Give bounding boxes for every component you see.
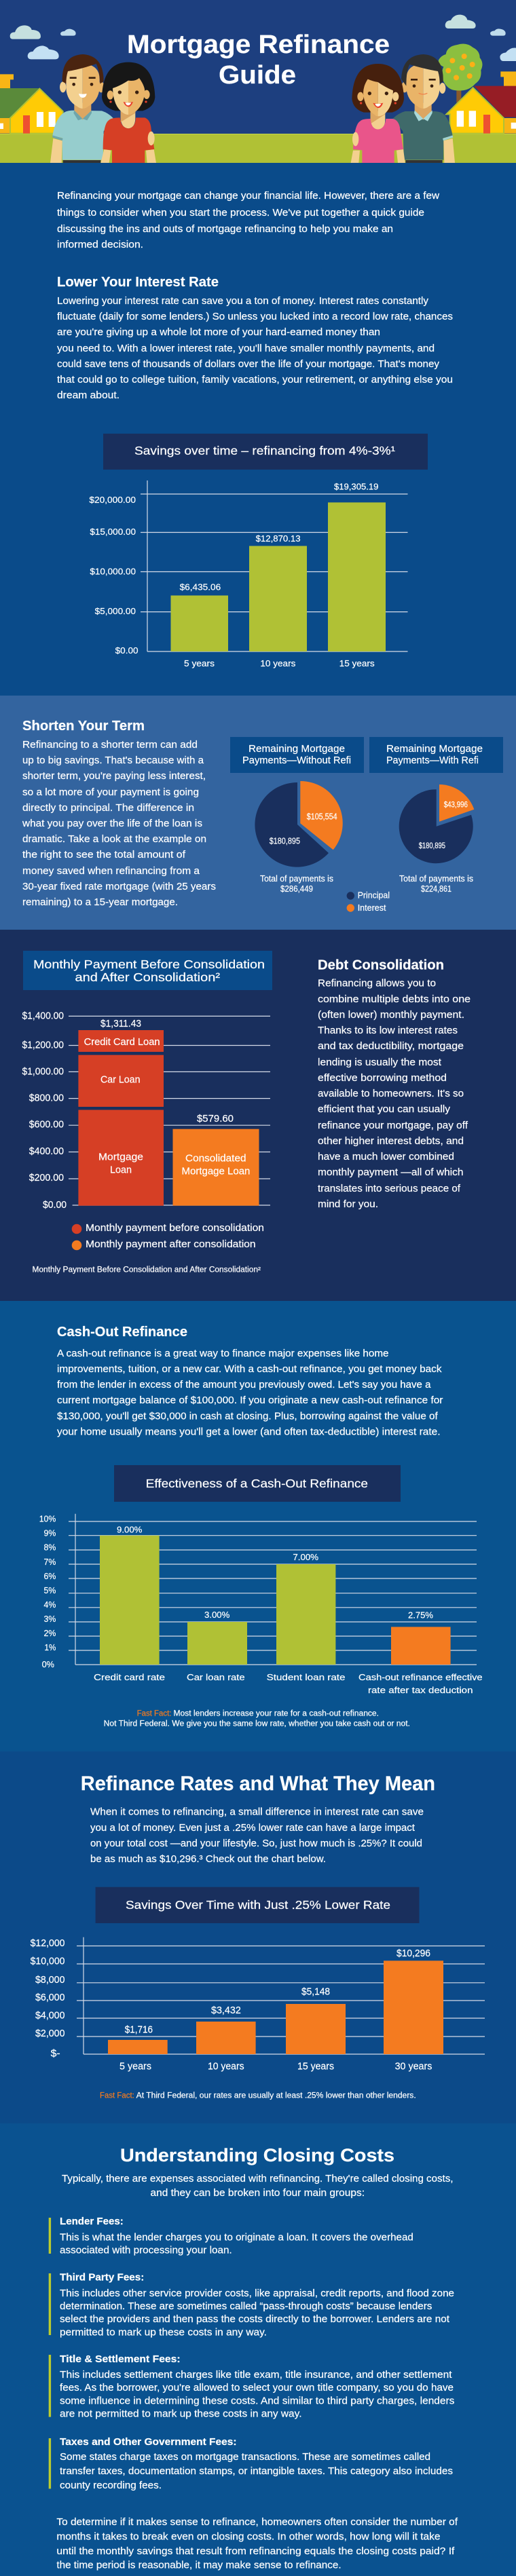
body: debt consolidation: effective borrowing method (318, 1073, 447, 1084)
item: title and settlement fees: Title & Settlement Fees: (60, 2354, 181, 2365)
bar chart: savings over time with lower rate: $5,148 (301, 1986, 330, 1998)
bar chart: effectiveness of a cash-out refinance: 7.00% (293, 1552, 318, 1562)
body: debt consolidation (318, 979, 471, 1210)
body: lower your interest rate (57, 296, 453, 401)
stacked bar chart: monthly payment: $400.00 (29, 1145, 64, 1157)
bar chart: savings over time with lower rate: $3,432 (211, 2005, 241, 2016)
item: third party fees (49, 2273, 454, 2338)
heading: lower your interest rate: Lower Your Interest Rate (57, 275, 219, 290)
chart title: monthly payment (23, 951, 272, 990)
body: shorten your term (22, 740, 216, 908)
bar chart: effectiveness of a cash-out refinance: 9% (43, 1528, 56, 1538)
bar chart: savings over time with lower rate: $10,296 (397, 1948, 430, 1959)
bar chart: effectiveness of a cash-out refinance: 0% (42, 1659, 54, 1669)
body: cash-out refinance: from the lender in excess of the amount you previously owed. Let's say you have a (57, 1380, 431, 1390)
bar chart: effectiveness of a cash-out refinance: 2.75% (408, 1610, 433, 1621)
body: shorten your term: the right to see the total amount of (22, 850, 186, 860)
stacked bar chart: monthly payment: Mortgage (98, 1151, 143, 1163)
body: shorten your term: dramatic. Take a look at the example on (22, 834, 206, 845)
item: taxes and other government fees: transfer taxes, documentation stamps, or intangible taxes. This category also includes (60, 2466, 453, 2477)
body: debt consolidation: lending is usually the most (318, 1057, 441, 1068)
stacked bar chart: monthly payment: Credit Card Loan (84, 1036, 160, 1048)
bar chart: effectiveness of a cash-out refinance: 6% (43, 1571, 56, 1581)
item: title and settlement fees: are not permitted to mark up these costs in any way. (60, 2409, 301, 2420)
stacked bar chart: monthly payment: Car Loan (100, 1074, 140, 1086)
body: refinance rates: on your total cost —and your lifestyle. So, just how much is .25%? It could (90, 1838, 422, 1849)
pie chart: with refi: $224,861 (421, 884, 452, 894)
body: refinance rates: you a lot of money. Even just a .25% lower rate can have a large impact (90, 1823, 415, 1834)
legend: principal and interest (347, 890, 390, 913)
legend: principal and interest: Principal (358, 890, 390, 901)
bar chart: savings over time with lower rate: 15 years (297, 2061, 334, 2072)
stacked bar chart: monthly payment: $200.00 (29, 1172, 64, 1183)
stacked bar chart: monthly payment: $1,200.00 (22, 1040, 64, 1051)
bar chart: effectiveness of a cash-out refinance: 8% (43, 1542, 56, 1553)
chart title: savings with lower rate: Savings Over Time with Just .25% Lower Rate (126, 1898, 390, 1912)
chart title: with refi: Remaining Mortgage (386, 743, 483, 755)
body: debt consolidation: refinance your mortgage, pay off (318, 1120, 468, 1131)
item: taxes and other government fees: Taxes and Other Government Fees: (60, 2437, 236, 2448)
bar chart: savings over time with lower rate: 5 years (119, 2061, 151, 2072)
bar chart: effectiveness of a cash-out refinance: 3% (43, 1614, 56, 1624)
heading: closing costs: Understanding Closing Costs (120, 2145, 394, 2165)
body: cash-out refinance: improvements, tuition, or a new car. With a cash-out refinance, you get money back (57, 1364, 442, 1375)
body: cash-out refinance: your home usually means you'll get a lower (and often tax-deductible) interest rate. (57, 1426, 440, 1437)
body: shorten your term: 30-year fixed rate mortgage (with 25 years (22, 882, 216, 892)
bar chart: effectiveness of a cash-out refinance: 3.00% (204, 1610, 230, 1620)
body: cash-out refinance: A cash-out refinance is a great way to finance major expenses like home (57, 1348, 388, 1359)
item: third party fees: select the providers and then pass the costs directly to the borrower. Lenders are not (60, 2314, 449, 2325)
fast fact: lower rates: At Third Federal, our rates are usually at least .25% lower than other lenders. (136, 2091, 416, 2100)
closing paragraph: To determine if it makes sense to refinance, homeowners often consider the number of (56, 2517, 458, 2528)
legend: before and after consolidation: Monthly payment after consolidation (86, 1238, 256, 1250)
bar chart: effectiveness of a cash-out refinance: rate after tax deduction (368, 1685, 473, 1695)
title: Mortgage Refinance (127, 31, 390, 59)
legend: principal and interest: Interest (358, 903, 386, 913)
body: debt consolidation: Refinancing allows you to (318, 979, 436, 989)
stacked bar chart: monthly payment: $1,400.00 (22, 1010, 64, 1022)
pie chart: without refi (255, 781, 343, 894)
body: lower your interest rate: could save tens of thousands of dollars over the life of your mortgage. That's money (57, 359, 440, 370)
bar chart: savings over time with lower rate (31, 1937, 485, 2072)
body: cash-out refinance: current mortgage balance of $100,000. If you originate a new cash-out refinance for (57, 1395, 443, 1406)
stacked bar chart: monthly payment (22, 1010, 270, 1211)
item: title and settlement fees: This includes settlement charges like title exam, title insurance, and other settlement (60, 2370, 452, 2381)
body: debt consolidation: combine multiple debts into one (318, 994, 471, 1005)
body: refinance rates: When it comes to refinancing, a small difference in interest rate can save (90, 1807, 424, 1818)
item: title and settlement fees: some influence in determining these costs. And similar to third party charges, lenders (60, 2395, 454, 2406)
chart title: savings with lower rate (96, 1887, 420, 1923)
bar chart: effectiveness of a cash-out refinance: 7% (43, 1557, 56, 1567)
bar chart: savings over time: $6,435.06 (180, 582, 221, 592)
item: lender fees: associated with processing your loan. (60, 2246, 232, 2256)
body: lower your interest rate: dream about. (57, 390, 119, 401)
fast fact: cash-out: Not Third Federal. We give you the same low rate, whether you take cash out or not. (104, 1720, 410, 1728)
heading: debt consolidation: Debt Consolidation (318, 958, 444, 973)
bar chart: savings over time: 10 years (260, 658, 296, 668)
stacked bar chart: monthly payment: Loan (110, 1164, 132, 1175)
body: debt consolidation: mind for you. (318, 1199, 378, 1210)
bar chart: effectiveness of a cash-out refinance: 9.00% (117, 1524, 143, 1535)
intro text: Refinancing your mortgage can change your financial life. However, there are a few (57, 191, 440, 202)
item: lender fees (49, 2216, 413, 2256)
panel: introduction and lower your interest rate (0, 163, 516, 696)
bar chart: savings over time: $20,000.00 (89, 495, 136, 505)
body: debt consolidation: efficient that you can usually (318, 1104, 451, 1115)
body: lower your interest rate: Lowering your interest rate can save you a ton of money. Interest rates constantly (57, 296, 429, 307)
body: debt consolidation: and tax deductibility, mortgage (318, 1041, 464, 1052)
bar chart: effectiveness of a cash-out refinance: 5% (43, 1585, 56, 1595)
stacked bar chart: monthly payment: $800.00 (29, 1092, 64, 1103)
bar chart: effectiveness of a cash-out refinance: 10% (39, 1513, 56, 1524)
stacked bar chart: monthly payment: $1,311.43 (100, 1018, 141, 1029)
item: taxes and other government fees: county recording fees. (60, 2480, 162, 2491)
stacked bar chart: monthly payment: Consolidated (185, 1153, 246, 1164)
panel: shorten your term (0, 696, 516, 930)
pie chart: without refi: Total of payments is (260, 873, 333, 884)
item: taxes and other government fees: Some states charge taxes on mortgage transactions. These are sometimes called (60, 2452, 430, 2463)
bar chart: effectiveness of a cash-out refinance: Credit card rate (94, 1672, 165, 1682)
chart title: without refi (230, 737, 364, 773)
legend: before and after consolidation: Monthly payment before consolidation (86, 1222, 264, 1234)
intro text: informed decision. (57, 240, 143, 250)
pie chart: with refi: $180,895 (419, 842, 445, 850)
closing paragraph: the time period is reasonable, it may make sense to refinance. (56, 2560, 342, 2571)
bar chart: effectiveness of a cash-out refinance: 2% (43, 1628, 56, 1638)
body: shorten your term: up to big savings. That's because with a (22, 755, 204, 766)
panel: debt consolidation (0, 930, 516, 1301)
chart title: without refi: Payments—Without Refi (242, 755, 351, 766)
item: third party fees: Third Party Fees: (60, 2273, 144, 2284)
chart title: savings over time (103, 434, 428, 470)
intro: closing costs: and they can be broken into four main groups: (151, 2188, 365, 2199)
bar chart: savings over time: $10,000.00 (90, 566, 136, 577)
body: shorten your term: directly to principal. The difference in (22, 803, 194, 814)
item: third party fees: permitted to mark up these costs in any way. (60, 2327, 267, 2338)
title: Guide (219, 61, 296, 90)
bar chart: savings over time with lower rate: $4,000 (35, 2010, 65, 2022)
body: debt consolidation: Thanks to its low interest rates (318, 1025, 458, 1036)
bar chart: savings over time: 15 years (339, 658, 375, 668)
closing paragraph: months it takes to break even on closing costs. In other words, how long will it take (56, 2532, 440, 2543)
bar chart: savings over time: $15,000.00 (90, 527, 136, 537)
chart title: with refi (369, 737, 503, 773)
body: shorten your term: remaining) to a 15-year mortgage. (22, 897, 178, 908)
body: lower your interest rate: fluctuate (daily for some lenders.) So unless you lucked into a record low rate, chances (57, 311, 453, 322)
body: refinance rates (90, 1807, 424, 1865)
body: debt consolidation: other higher interest debts, and (318, 1136, 464, 1147)
bar chart: effectiveness of a cash-out refinance (39, 1513, 483, 1695)
pie chart: with refi: $43,996 (444, 801, 468, 810)
bar chart: effectiveness of a cash-out refinance: Car loan rate (187, 1672, 245, 1682)
body: debt consolidation: have a much lower combined (318, 1152, 454, 1162)
stacked bar chart: monthly payment: $600.00 (29, 1119, 64, 1131)
body: lower your interest rate: you need to. With a lower interest rate, you'll have smaller monthly payments, and (57, 343, 435, 354)
chart title: monthly payment: and After Consolidation² (75, 970, 220, 984)
item: title and settlement fees: fees. As the borrower, you're allowed to select your own title company, so you do have (60, 2383, 454, 2393)
intro: closing costs (62, 2174, 453, 2199)
chart title: without refi: Remaining Mortgage (248, 743, 345, 755)
item: third party fees: determination. These are sometimes called “pass-through costs” because lenders (60, 2301, 432, 2312)
body: shorten your term: money saved when refinancing from a (22, 866, 200, 877)
bar chart: effectiveness of a cash-out refinance: Cash-out refinance effective (358, 1672, 483, 1682)
bar chart: savings over time: $0.00 (115, 645, 139, 656)
body: debt consolidation: translates into serious peace of (318, 1183, 461, 1194)
pie chart: with refi: Total of payments is (399, 873, 473, 884)
fast fact: cash-out: Most lenders increase your rate for a cash-out refinance. (174, 1710, 379, 1718)
body: cash-out refinance (57, 1348, 443, 1437)
caption: Monthly Payment Before Consolidation and After Consolidation² (33, 1266, 261, 1274)
body: cash-out refinance: $130,000, you'll get $30,000 in cash at closing. Plus, borrowing against the value of (57, 1411, 439, 1422)
fast fact: cash-out: Fast Fact: (137, 1710, 171, 1718)
bar chart: effectiveness of a cash-out refinance: 1% (45, 1642, 56, 1652)
heading: shorten your term: Shorten Your Term (22, 719, 145, 734)
item: taxes and other government fees (49, 2437, 453, 2491)
body: debt consolidation: monthly payment —all of which (318, 1167, 463, 1178)
heading: cash-out refinance: Cash-Out Refinance (57, 1325, 187, 1340)
stacked bar chart: monthly payment: $579.60 (197, 1113, 234, 1124)
item: lender fees: This is what the lender charges you to originate a loan. It covers the overhead (60, 2233, 413, 2243)
stacked bar chart: monthly payment: $1,000.00 (22, 1065, 64, 1078)
item: lender fees: Lender Fees: (60, 2216, 124, 2227)
intro text: discussing the ins and outs of mortgage refinancing to help you make an (57, 224, 393, 235)
bar chart: savings over time: $5,000.00 (95, 606, 136, 616)
bar chart: savings over time with lower rate: $1,716 (125, 2024, 153, 2036)
body: lower your interest rate: are you're giving up a whole lot more of your hard-earned money than (57, 327, 380, 338)
heading: refinance rates: Refinance Rates and What They Mean (81, 1773, 435, 1795)
pie chart: without refi: $286,449 (280, 884, 313, 894)
bar chart: savings over time with lower rate: $8,000 (35, 1974, 65, 1986)
body: lower your interest rate: that could go to college tuition, family vacations, your retirement, or anything else you (57, 375, 453, 385)
chart title: monthly payment: Monthly Payment Before Consolidation (33, 958, 265, 971)
chart title: effectiveness: Effectiveness of a Cash-Out Refinance (146, 1477, 368, 1490)
body: shorten your term: so a lot more of your payment is going (22, 787, 199, 798)
bar chart: savings over time with lower rate: 30 years (395, 2061, 432, 2072)
stacked bar chart: monthly payment: $0.00 (43, 1199, 67, 1211)
body: debt consolidation: (often lower) monthly payment. (318, 1010, 464, 1021)
intro text: things to consider when you start the process. We've put together a quick guide (57, 208, 424, 219)
bar chart: savings over time with lower rate: $2,000 (35, 2028, 65, 2039)
pie chart: without refi: $105,554 (307, 811, 337, 821)
bar chart: savings over time with lower rate: 10 years (208, 2061, 244, 2072)
fast fact: cash-out (104, 1710, 410, 1728)
title (127, 31, 390, 90)
body: shorten your term: what you pay over the life of the loan is (22, 818, 202, 829)
bar chart: savings over time with lower rate: $10,000 (31, 1955, 65, 1967)
panel: cash-out refinance (0, 1301, 516, 1751)
panel: header banner (0, 0, 516, 163)
panel: understanding closing costs (0, 2123, 516, 2576)
pie chart: without refi: $180,895 (270, 835, 300, 846)
illustration: right house, tree, clouds and couple (351, 15, 516, 163)
bar chart: savings over time: 5 years (184, 658, 215, 668)
pie chart: with refi (399, 784, 474, 894)
body: refinance rates: be as much as $10,296.³ Check out the chart below. (90, 1854, 326, 1865)
chart title: savings over time: Savings over time – refinancing from 4%-3%¹ (134, 444, 395, 457)
bar chart: effectiveness of a cash-out refinance: 4% (43, 1599, 56, 1610)
bar chart: savings over time with lower rate: $- (51, 2048, 60, 2060)
stacked bar chart: monthly payment: Mortgage Loan (182, 1166, 250, 1177)
bar chart: savings over time with lower rate: $6,000 (35, 1992, 65, 2003)
body: shorten your term: Refinancing to a shorter term can add (22, 740, 198, 751)
panel: refinance rates (0, 1751, 516, 2123)
bar chart: savings over time: $19,305.19 (334, 482, 378, 492)
body: debt consolidation: available to homeowners. It's so (318, 1088, 464, 1099)
fast fact: lower rates: Fast Fact: (100, 2091, 134, 2100)
chart title: with refi: Payments—With Refi (386, 755, 479, 766)
legend: before and after consolidation (72, 1222, 264, 1250)
intro text (57, 191, 440, 250)
bar chart: savings over time (89, 480, 407, 668)
item: title and settlement fees (49, 2354, 454, 2420)
chart title: effectiveness (114, 1465, 401, 1502)
closing paragraph (56, 2517, 458, 2571)
intro: closing costs: Typically, there are expenses associated with refinancing. They're called closing costs, (62, 2174, 453, 2184)
body: shorten your term: shorter term, you're paying less interest, (22, 771, 206, 782)
illustration: left house, clouds and couple (0, 25, 156, 163)
bar chart: effectiveness of a cash-out refinance: Student loan rate (267, 1672, 345, 1682)
item: third party fees: This includes other service provider costs, like appraisal, credit reports, and flood zone (60, 2288, 454, 2299)
closing paragraph: until the monthly savings that result from refinancing equals the closing costs paid? If (56, 2546, 455, 2557)
bar chart: savings over time with lower rate: $12,000 (31, 1937, 65, 1949)
bar chart: savings over time: $12,870.13 (256, 533, 301, 544)
